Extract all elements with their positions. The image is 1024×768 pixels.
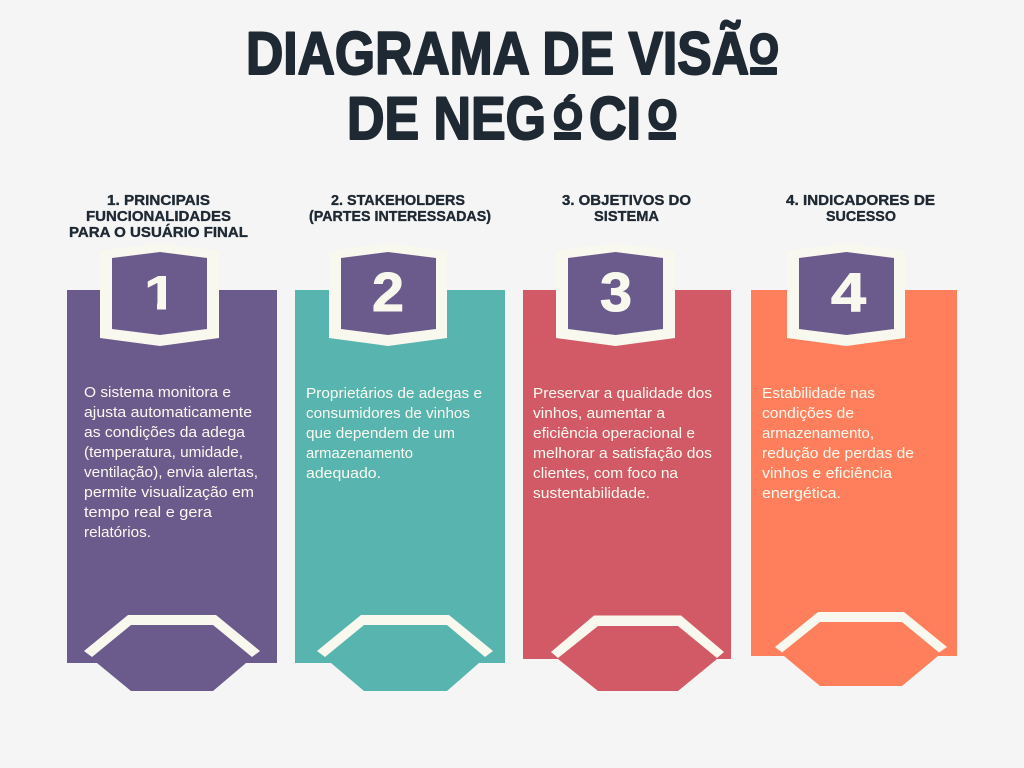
panel: column 3 objetivos [523, 193, 731, 691]
chevron: column 1 [84, 615, 260, 657]
body text: column 3: Preservar a qualidade dos [533, 386, 712, 402]
title: O [750, 25, 778, 72]
body text: column 2 [306, 386, 482, 482]
heading: column 3: 3. OBJETIVOS DO [562, 193, 691, 209]
icon: number badge 1: 1 [144, 266, 177, 319]
body text: column 4: armazenamento, [762, 426, 874, 442]
heading: column 2: 2. STAKEHOLDERS [331, 193, 465, 209]
chevron: column 4 [775, 612, 947, 652]
icon: number badge 4: 4 [831, 261, 866, 323]
heading: column 2 [309, 193, 491, 225]
card background: column 3 [523, 290, 731, 691]
body text: column 3: melhorar a satisfação dos [533, 446, 712, 462]
body text: column 1: ventilação), envia alertas, [84, 465, 258, 481]
icon: number badge 2: 2 [372, 261, 404, 323]
body text: column 1: tempo real e gera [84, 505, 213, 521]
body text: column 2: consumidores de vinhos [306, 406, 470, 422]
body text: column 1: relatórios. [84, 525, 151, 541]
title: O [648, 91, 677, 138]
title: DE NEG [347, 85, 546, 152]
body text: column 3: clientes, com foco na [533, 466, 679, 482]
body text: column 2: armazenamento [306, 446, 413, 462]
body text: column 4: Estabilidade nas [762, 386, 875, 402]
card background: column 2 [295, 290, 505, 691]
card background: column 1 [67, 290, 277, 691]
icon: number badge 3: 3 [600, 261, 632, 323]
heading: column 4: 4. INDICADORES DE [786, 193, 935, 209]
body text: column 2: Proprietários de adegas e [306, 386, 482, 402]
icon: number badge 1 [100, 243, 219, 346]
icon: number badge 3 [556, 243, 675, 346]
panel: column 4 indicadores [751, 193, 957, 686]
body text: column 3: vinhos, aumentar a [533, 406, 666, 422]
heading: column 4: SUCESSO [826, 209, 896, 225]
chevron: column 2 [317, 615, 493, 657]
body text: column 4 [762, 386, 914, 502]
body text: column 2: adequado. [306, 466, 381, 482]
title: DIAGRAMA DE VISÃ [246, 20, 749, 87]
heading: column 3 [562, 193, 691, 225]
title: CI [589, 85, 641, 152]
body text: column 1: permite visualização em [84, 485, 254, 501]
panel: column 2 stakeholders [295, 193, 505, 691]
body text: column 4: vinhos e eficiência [762, 466, 893, 482]
body text: column 4: condições de [762, 406, 854, 422]
heading: column 1: FUNCIONALIDADES [86, 209, 231, 225]
chevron: column 3 [551, 616, 724, 658]
body text: column 1: O sistema monitora e [84, 385, 231, 401]
title: Ó [554, 94, 582, 138]
heading: column 1: PARA O USUÁRIO FINAL [69, 224, 248, 241]
body text: column 3 [533, 386, 712, 502]
body text: column 1 [84, 385, 258, 541]
panel: column 1 funcionalidades [67, 193, 277, 691]
body text: column 1: (temperatura, umidade, [84, 445, 243, 461]
body text: column 1: as condições da adega [84, 425, 246, 441]
heading: column 1 [69, 193, 248, 241]
heading: column 3: SISTEMA [594, 209, 660, 225]
body text: column 3: sustentabilidade. [533, 486, 650, 502]
body text: column 4: redução de perdas de [762, 446, 914, 462]
body text: column 1: ajusta automaticamente [84, 405, 252, 421]
icon: number badge 4 [787, 243, 905, 346]
body text: column 2: que dependem de um [306, 426, 455, 442]
card background: column 4 [751, 290, 957, 686]
body text: column 3: eficiência operacional e [533, 426, 695, 442]
heading: column 4 [786, 193, 935, 225]
body text: column 4: energética. [762, 486, 841, 502]
icon: number badge 2 [329, 243, 447, 346]
title [246, 20, 778, 152]
heading: column 1: 1. PRINCIPAIS [107, 193, 210, 209]
heading: column 2: (PARTES INTERESSADAS) [309, 209, 491, 225]
